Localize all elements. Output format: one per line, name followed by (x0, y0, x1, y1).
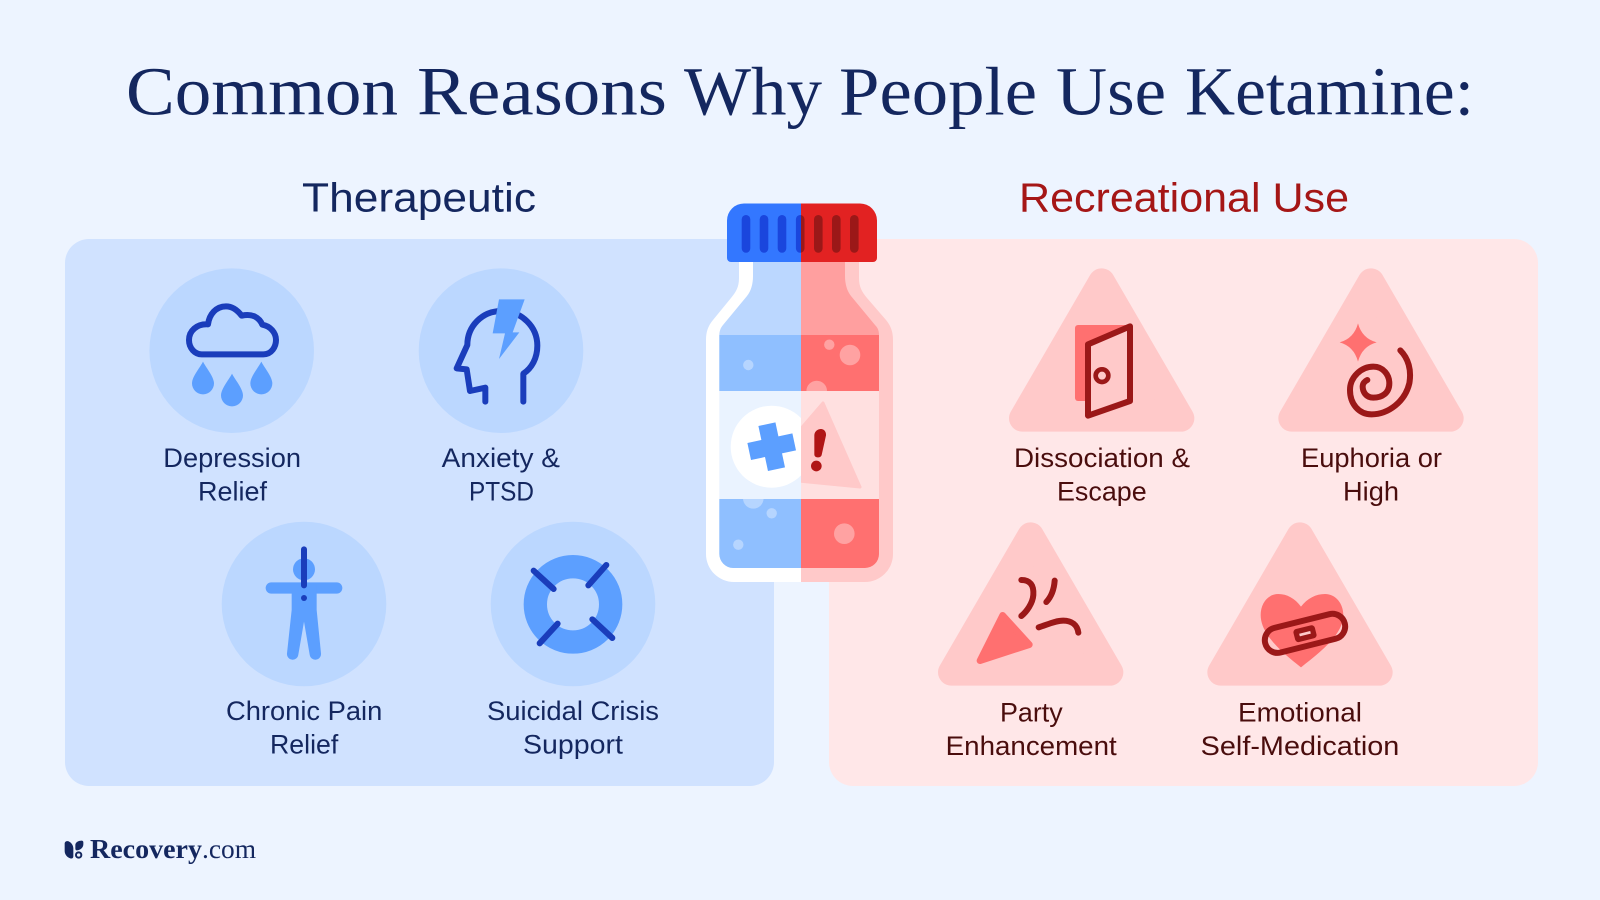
label: euphoria or high (1301, 443, 1442, 507)
icon: warning triangle with door (1022, 282, 1181, 418)
label: euphoria or high: Euphoria or (1301, 443, 1442, 473)
panel: therapeutic (65, 239, 774, 786)
central bottle illustration (706, 204, 893, 582)
title: People (839, 54, 1037, 130)
label: dissociation and escape: Escape (1057, 477, 1147, 507)
bottle cap (727, 204, 877, 262)
label: party enhancement (946, 698, 1117, 761)
logo: Recovery.com: Recovery (90, 834, 203, 864)
item: dissociation and escape (1014, 282, 1190, 507)
heading: therapeutic: Therapeutic (302, 174, 536, 220)
icon: logo mark (65, 841, 83, 859)
logo: Recovery.com: .com (202, 834, 256, 864)
icon: body with pain marker (266, 549, 342, 660)
title: Common (126, 54, 398, 130)
item: party enhancement (946, 536, 1117, 761)
label: chronic pain relief: Relief (270, 729, 339, 759)
label: anxiety and ptsd: PTSD (469, 477, 534, 507)
icon: warning triangle with exclamation (798, 403, 860, 487)
icon: rain cloud (189, 306, 276, 406)
title: Reasons (417, 54, 667, 130)
label: suicidal crisis support: Support (523, 729, 624, 759)
bottle outline (706, 255, 893, 582)
label: euphoria or high: High (1343, 477, 1399, 507)
icon: lifebuoy (534, 565, 612, 643)
icon: warning triangle with party popper (951, 536, 1110, 672)
title: Why (684, 54, 822, 130)
label: depression relief (163, 443, 301, 507)
item: suicidal crisis support (487, 522, 659, 759)
heading: recreational use: Recreational Use (1019, 174, 1349, 220)
icon: warning triangle with bandaged heart (1221, 536, 1379, 672)
label: emotional self-medication: Self-Medication (1201, 731, 1399, 761)
icon: warning triangle with spiral and sparkle (1292, 282, 1450, 418)
icon: medical cross badge (730, 406, 801, 488)
label: emotional self-medication (1201, 698, 1399, 761)
label: party enhancement: Enhancement (946, 731, 1117, 761)
item: depression relief (149, 268, 314, 507)
label: depression relief: Depression (163, 443, 301, 473)
label: dissociation and escape (1014, 443, 1190, 507)
label: chronic pain relief: Chronic Pain (226, 696, 382, 726)
label: dissociation and escape: Dissociation & (1014, 443, 1190, 473)
label: depression relief: Relief (198, 477, 268, 507)
item: chronic pain relief (222, 522, 386, 759)
item: emotional self-medication (1201, 536, 1399, 761)
bottle liquid and label (715, 255, 883, 569)
label: emotional self-medication: Emotional (1238, 698, 1362, 728)
label: anxiety and ptsd (442, 443, 560, 507)
title (126, 54, 1474, 130)
label: anxiety and ptsd: Anxiety & (442, 443, 560, 473)
label: suicidal crisis support: Suicidal Crisis (487, 696, 659, 726)
panel: recreational use (829, 239, 1538, 786)
item: anxiety and ptsd (419, 268, 583, 507)
icon: head with lightning bolt (457, 299, 537, 402)
label: chronic pain relief (226, 696, 382, 759)
item: euphoria or high (1292, 282, 1450, 507)
title: Use (1056, 54, 1166, 130)
label: party enhancement: Party (1000, 698, 1063, 728)
label: suicidal crisis support (487, 696, 659, 759)
title: Ketamine: (1185, 54, 1474, 130)
logo: Recovery.com (65, 834, 256, 864)
